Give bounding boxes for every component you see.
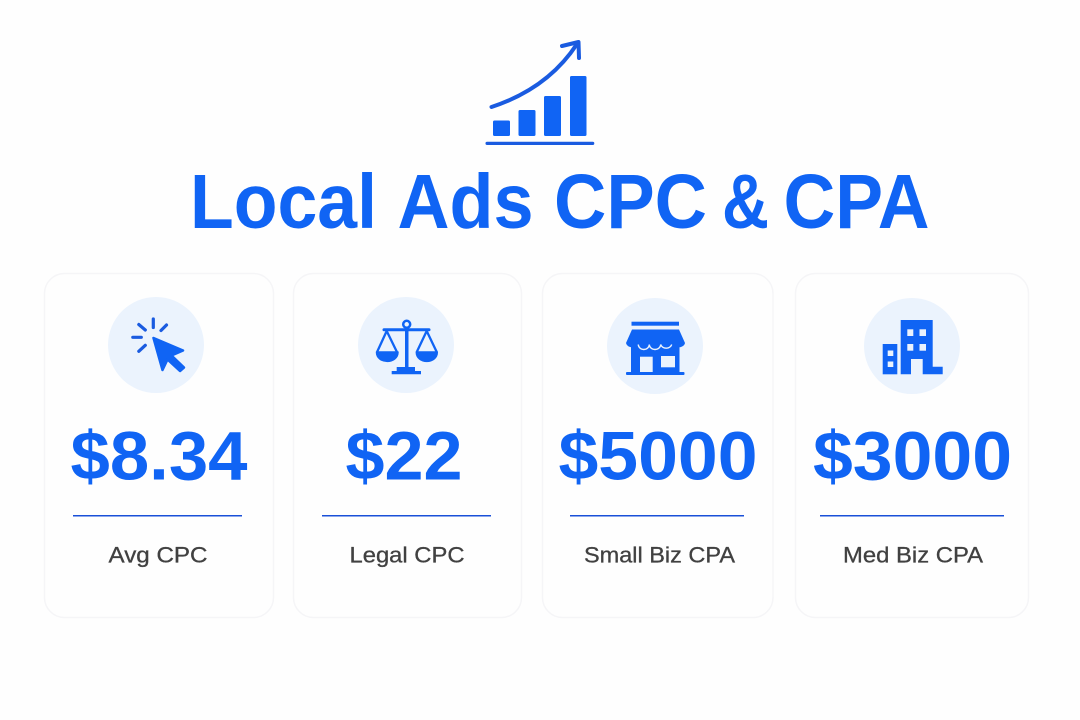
title: CPC xyxy=(554,159,707,245)
panel: Small Biz CPA xyxy=(542,274,773,618)
label: Med Biz CPA xyxy=(843,542,983,568)
title: CPA xyxy=(784,159,930,245)
icon: scales of justice xyxy=(358,297,454,393)
value: $8.34 xyxy=(70,418,248,494)
icon: rising bar chart with arrow xyxy=(486,42,594,145)
title: Ads xyxy=(398,159,534,245)
icon: storefront xyxy=(607,298,703,394)
title: & xyxy=(722,159,769,245)
title: Local xyxy=(190,159,377,245)
value: $22 xyxy=(346,418,462,494)
value: $5000 xyxy=(558,418,758,494)
panel: Legal CPC xyxy=(294,274,522,618)
panel: Avg CPC xyxy=(44,274,274,618)
label: Legal CPC xyxy=(350,542,464,568)
icon: office buildings xyxy=(864,298,960,394)
icon: cursor click xyxy=(108,297,204,393)
panel: Med Biz CPA xyxy=(796,274,1028,618)
label: Avg CPC xyxy=(108,542,208,568)
value: $3000 xyxy=(813,418,1012,494)
title xyxy=(190,159,930,245)
label: Small Biz CPA xyxy=(584,542,735,568)
